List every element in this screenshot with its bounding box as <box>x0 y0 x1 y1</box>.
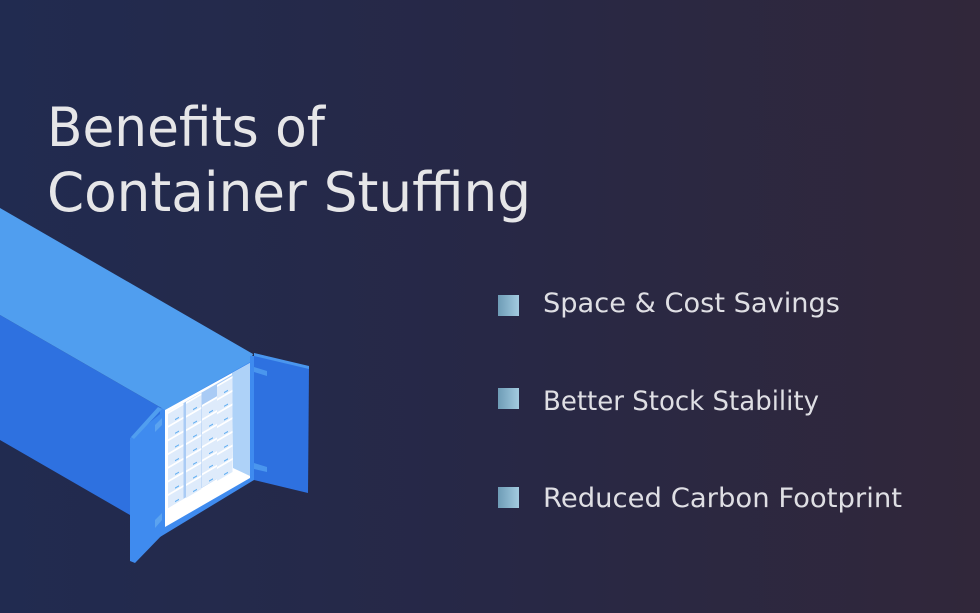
title <box>47 96 531 224</box>
left door <box>130 407 165 563</box>
container opening frame <box>160 358 254 537</box>
stacked boxes <box>168 376 232 508</box>
benefit: space and cost savings: Space & Cost Savings <box>543 288 840 319</box>
benefit: reduced carbon footprint: Reduced Carbon Footprint <box>543 483 902 514</box>
benefit: better stock stability: Better Stock Stability <box>543 386 819 417</box>
container interior <box>165 363 250 527</box>
right door <box>250 353 309 493</box>
container top face <box>0 208 253 410</box>
illustration: shipping container <box>0 208 309 563</box>
benefit list <box>498 288 902 514</box>
title: Benefits of <box>47 96 327 159</box>
title: Container Stuffing <box>47 161 531 224</box>
container side face <box>0 315 165 552</box>
